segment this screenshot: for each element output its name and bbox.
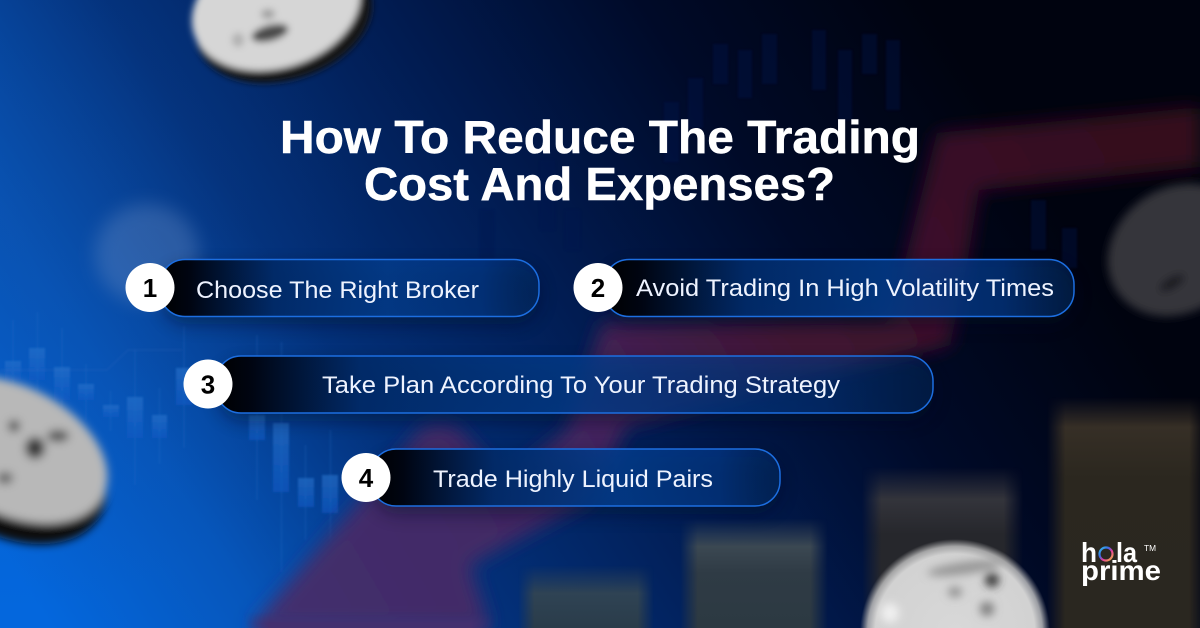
logo: hola prime: prime [1081, 555, 1161, 586]
coin bottom details [881, 557, 1003, 623]
background candlestick chart: lower left [0, 312, 338, 572]
coin stacks [518, 397, 1200, 628]
step 1: choose the right broker: 1 [143, 273, 157, 303]
candle wicks [12, 312, 331, 572]
coin: bottom [858, 536, 1052, 628]
step 4: trade highly liquid pairs: 4 [359, 463, 374, 493]
coin: faint behind pill [95, 204, 199, 304]
title: How To Reduce The Trading [280, 111, 920, 163]
step 2: avoid trading in high volatility times: 2 [591, 273, 605, 303]
logo: hola prime [1081, 537, 1161, 586]
step 3: take plan according to your trading strategy: Take Plan According To Your Trading Strategy [322, 372, 840, 399]
coin: right dark [1082, 157, 1200, 343]
coin: left [0, 347, 132, 575]
candle bodies [5, 348, 338, 513]
logo: hola prime: h [1081, 537, 1097, 568]
step 1: choose the right broker [126, 260, 539, 324]
logo: hola prime: la [1116, 537, 1137, 568]
red and purple trend arrow [244, 107, 1200, 628]
faint trend line [0, 350, 182, 370]
coin: top [176, 0, 388, 104]
step 3: take plan according to your trading strategy: 3 [201, 370, 215, 400]
background candlestick chart: top dark [480, 30, 1077, 268]
title [280, 111, 920, 210]
step 1: choose the right broker: Choose The Right Broker [196, 277, 479, 304]
stack 4 [1047, 397, 1200, 628]
step 4: trade highly liquid pairs: Trade Highly Liquid Pairs [433, 466, 713, 493]
title: Cost And Expenses? [364, 158, 835, 210]
stack 3 [865, 472, 1020, 602]
step 2: avoid trading in high volatility times [574, 260, 1074, 324]
step 3: take plan according to your trading strategy [184, 356, 933, 421]
step 4: trade highly liquid pairs [342, 449, 780, 514]
stack 1 [520, 570, 650, 628]
step 2: avoid trading in high volatility times: Avoid Trading In High Volatility Times [636, 275, 1054, 302]
stack 2 [680, 518, 828, 628]
logo: hola prime: TM [1144, 543, 1156, 553]
